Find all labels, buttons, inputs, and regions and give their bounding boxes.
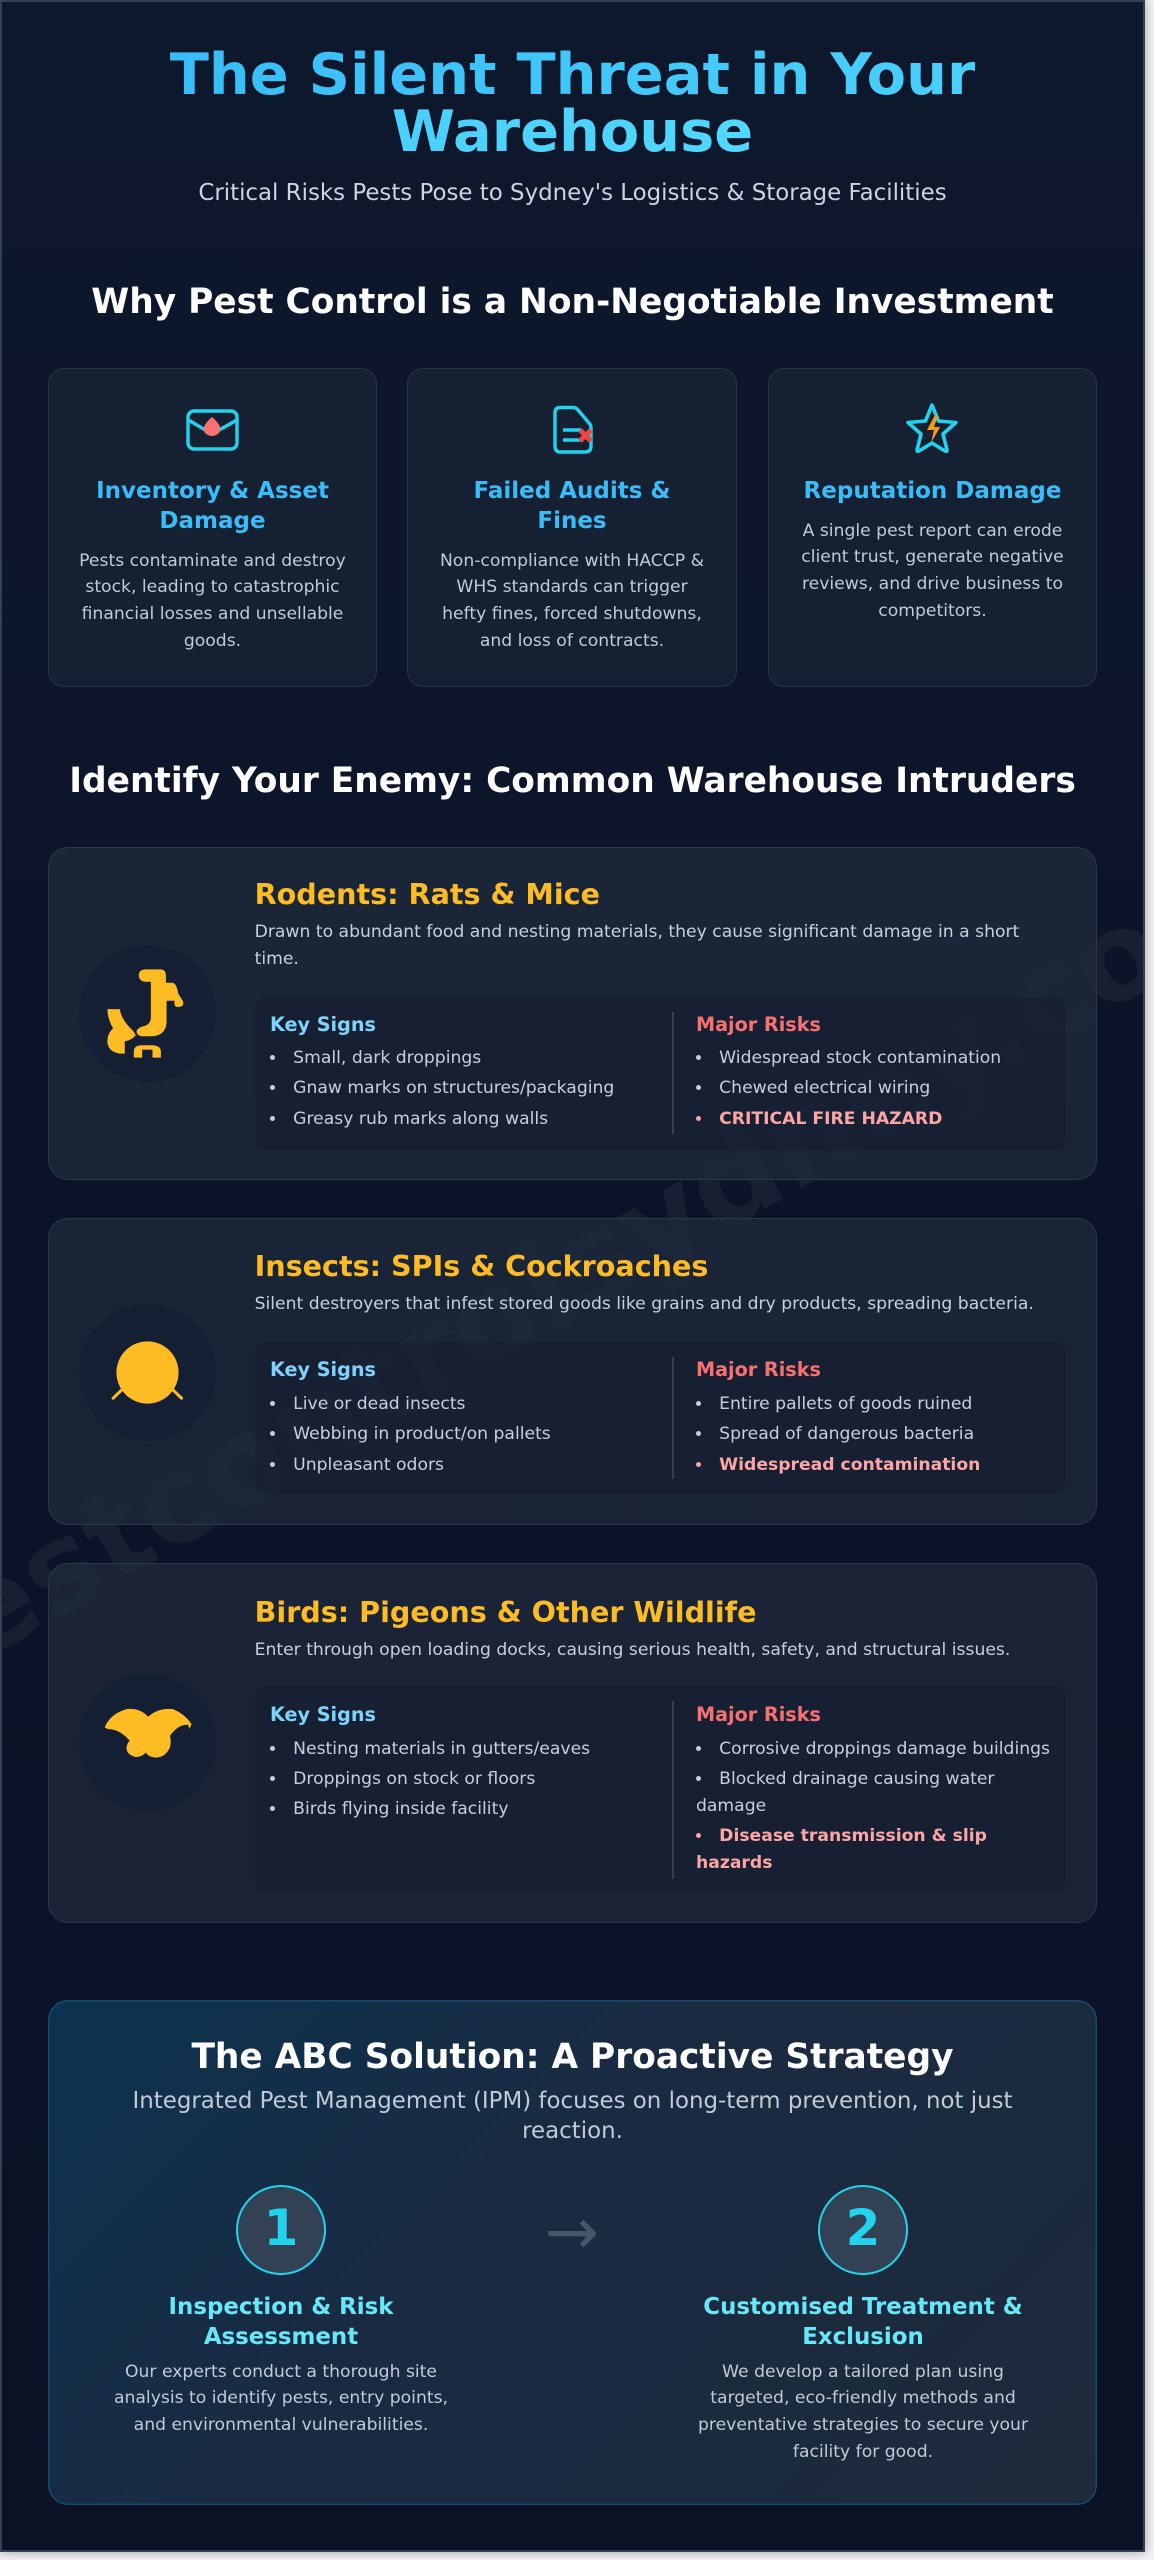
signs and risks box xyxy=(255,996,1066,1150)
icon: insect xyxy=(79,1304,216,1440)
icon: rodent xyxy=(79,945,216,1082)
card text: Pests contaminate and destroy xyxy=(79,551,346,571)
step 2 heading xyxy=(703,2294,1023,2350)
panel: inventory and asset damage xyxy=(48,368,377,687)
key signs list xyxy=(270,1394,551,1475)
card heading: Inventory & Asset xyxy=(96,478,329,504)
card heading: Damage xyxy=(159,508,266,534)
key signs list xyxy=(270,1048,614,1129)
step 1 text: Our experts conduct a thorough site xyxy=(125,2362,437,2382)
step 2 text: facility for good. xyxy=(793,2442,933,2462)
panel: failed audits and fines xyxy=(407,368,737,687)
step 1 heading: Inspection & Risk xyxy=(169,2294,393,2320)
solution intro: reaction. xyxy=(522,2118,623,2144)
signs and risks box xyxy=(255,1342,1066,1494)
solution heading: The ABC Solution: A Proactive Strategy xyxy=(191,2037,954,2077)
pest description: Drawn to abundant food and nesting materials, they cause significant damage in a short xyxy=(255,922,1019,942)
major risks list xyxy=(696,1394,980,1475)
card text: stock, leading to catastrophic xyxy=(85,577,340,597)
major risks heading: Major Risks xyxy=(696,1358,821,1381)
step 1 number xyxy=(236,2185,326,2275)
heading: identify your enemy: Identify Your Enemy: Common Warehouse Intruders xyxy=(69,761,1076,801)
card text: goods. xyxy=(184,631,241,651)
step 2 text xyxy=(698,2362,1028,2462)
panel: reputation damage xyxy=(768,368,1097,687)
step 1 text xyxy=(114,2362,448,2435)
panel: birds xyxy=(48,1563,1097,1923)
signs and risks box xyxy=(255,1686,1066,1893)
major risks heading: Major Risks xyxy=(696,1703,821,1726)
major risks list: Spread of dangerous bacteria xyxy=(719,1424,974,1444)
step 1 heading xyxy=(169,2294,394,2350)
card text xyxy=(79,551,346,651)
pest description: Enter through open loading docks, causing serious health, safety, and structural issues. xyxy=(255,1640,1010,1660)
major risks list: hazards xyxy=(696,1853,772,1873)
icon: star with lightning xyxy=(906,403,958,454)
key signs list: Gnaw marks on structures/packaging xyxy=(293,1078,614,1098)
card text: WHS standards can trigger xyxy=(456,577,688,597)
card text: Non-compliance with HACCP & xyxy=(440,551,704,571)
card heading: Reputation Damage xyxy=(804,478,1061,504)
card heading xyxy=(474,478,670,534)
major risks list: damage xyxy=(696,1796,766,1816)
step 2 heading: Exclusion xyxy=(802,2324,924,2350)
step 2 number xyxy=(818,2185,908,2275)
icon: envelope with drop xyxy=(186,409,239,451)
icon: bird xyxy=(79,1674,216,1811)
solution intro xyxy=(133,2088,1012,2144)
title: Warehouse xyxy=(392,98,753,164)
key signs list: Webbing in product/on pallets xyxy=(293,1424,551,1444)
pest description: Silent destroyers that infest stored goods like grains and dry products, spreading bacteria. xyxy=(255,1294,1034,1314)
step 2 text: targeted, eco-friendly methods and xyxy=(710,2388,1016,2408)
card text: financial losses and unsellable xyxy=(82,604,343,624)
key signs heading: Key Signs xyxy=(270,1013,376,1036)
major risks list: CRITICAL FIRE HAZARD xyxy=(719,1109,942,1129)
pest heading: Birds: Pigeons & Other Wildlife xyxy=(255,1594,756,1628)
icon: document with cross xyxy=(553,406,593,454)
pest heading: Insects: SPIs & Cockroaches xyxy=(255,1248,708,1282)
major risks list: Chewed electrical wiring xyxy=(719,1078,930,1098)
key signs list: Birds flying inside facility xyxy=(293,1799,508,1819)
card text: competitors. xyxy=(878,601,987,621)
major risks list: Corrosive droppings damage buildings xyxy=(719,1738,1050,1758)
pest heading: Rodents: Rats & Mice xyxy=(255,877,600,911)
card text xyxy=(801,521,1064,621)
key signs list: Droppings on stock or floors xyxy=(293,1769,535,1789)
major risks list xyxy=(696,1048,1001,1129)
step 1 text: analysis to identify pests, entry points, xyxy=(114,2388,448,2408)
major risks list: Blocked drainage causing water xyxy=(719,1769,994,1789)
step 2 text: preventative strategies to secure your xyxy=(698,2415,1028,2435)
card heading xyxy=(96,478,329,534)
step 1 text: and environmental vulnerabilities. xyxy=(134,2415,428,2435)
card text: reviews, and drive business to xyxy=(802,574,1063,594)
key signs list xyxy=(270,1738,590,1819)
step 2 number: 2 xyxy=(846,2199,880,2257)
panel: insects xyxy=(48,1218,1097,1525)
title: The Silent Threat in Your xyxy=(170,40,975,108)
arrow: → xyxy=(545,2195,599,2270)
panel: rodents xyxy=(48,847,1097,1180)
subtitle: Critical Risks Pests Pose to Sydney's Logistics & Storage Facilities xyxy=(198,180,947,206)
solution intro: Integrated Pest Management (IPM) focuses on long-term prevention, not just xyxy=(133,2088,1012,2114)
step 2 heading: Customised Treatment & xyxy=(703,2294,1023,2320)
card text: and loss of contracts. xyxy=(480,631,664,651)
major risks list: Entire pallets of goods ruined xyxy=(719,1394,972,1414)
key signs list: Live or dead insects xyxy=(293,1394,466,1414)
step 2 text: We develop a tailored plan using xyxy=(722,2362,1004,2382)
panel: ABC solution xyxy=(48,2000,1097,2505)
major risks list xyxy=(696,1738,1050,1873)
step 1 heading: Assessment xyxy=(204,2324,358,2350)
key signs list: Nesting materials in gutters/eaves xyxy=(293,1738,590,1758)
card text xyxy=(440,551,704,651)
major risks list: Widespread stock contamination xyxy=(719,1048,1001,1068)
heading: why pest control: Why Pest Control is a Non-Negotiable Investment xyxy=(91,282,1054,322)
card heading: Failed Audits & xyxy=(474,478,670,504)
step 1 number: 1 xyxy=(264,2199,298,2257)
major risks heading: Major Risks xyxy=(696,1013,821,1036)
card heading: Fines xyxy=(537,508,607,534)
key signs heading: Key Signs xyxy=(270,1703,376,1726)
major risks list: Disease transmission & slip xyxy=(719,1826,987,1846)
key signs list: Unpleasant odors xyxy=(293,1455,444,1475)
title xyxy=(170,40,975,164)
card text: hefty fines, forced shutdowns, xyxy=(442,604,702,624)
pest description xyxy=(255,922,1019,968)
major risks list: Widespread contamination xyxy=(719,1455,980,1475)
card text: client trust, generate negative xyxy=(801,547,1064,567)
key signs list: Greasy rub marks along walls xyxy=(293,1109,548,1129)
card text: A single pest report can erode xyxy=(803,521,1062,541)
pest description: time. xyxy=(255,948,299,968)
key signs list: Small, dark droppings xyxy=(293,1048,481,1068)
key signs heading: Key Signs xyxy=(270,1358,376,1381)
